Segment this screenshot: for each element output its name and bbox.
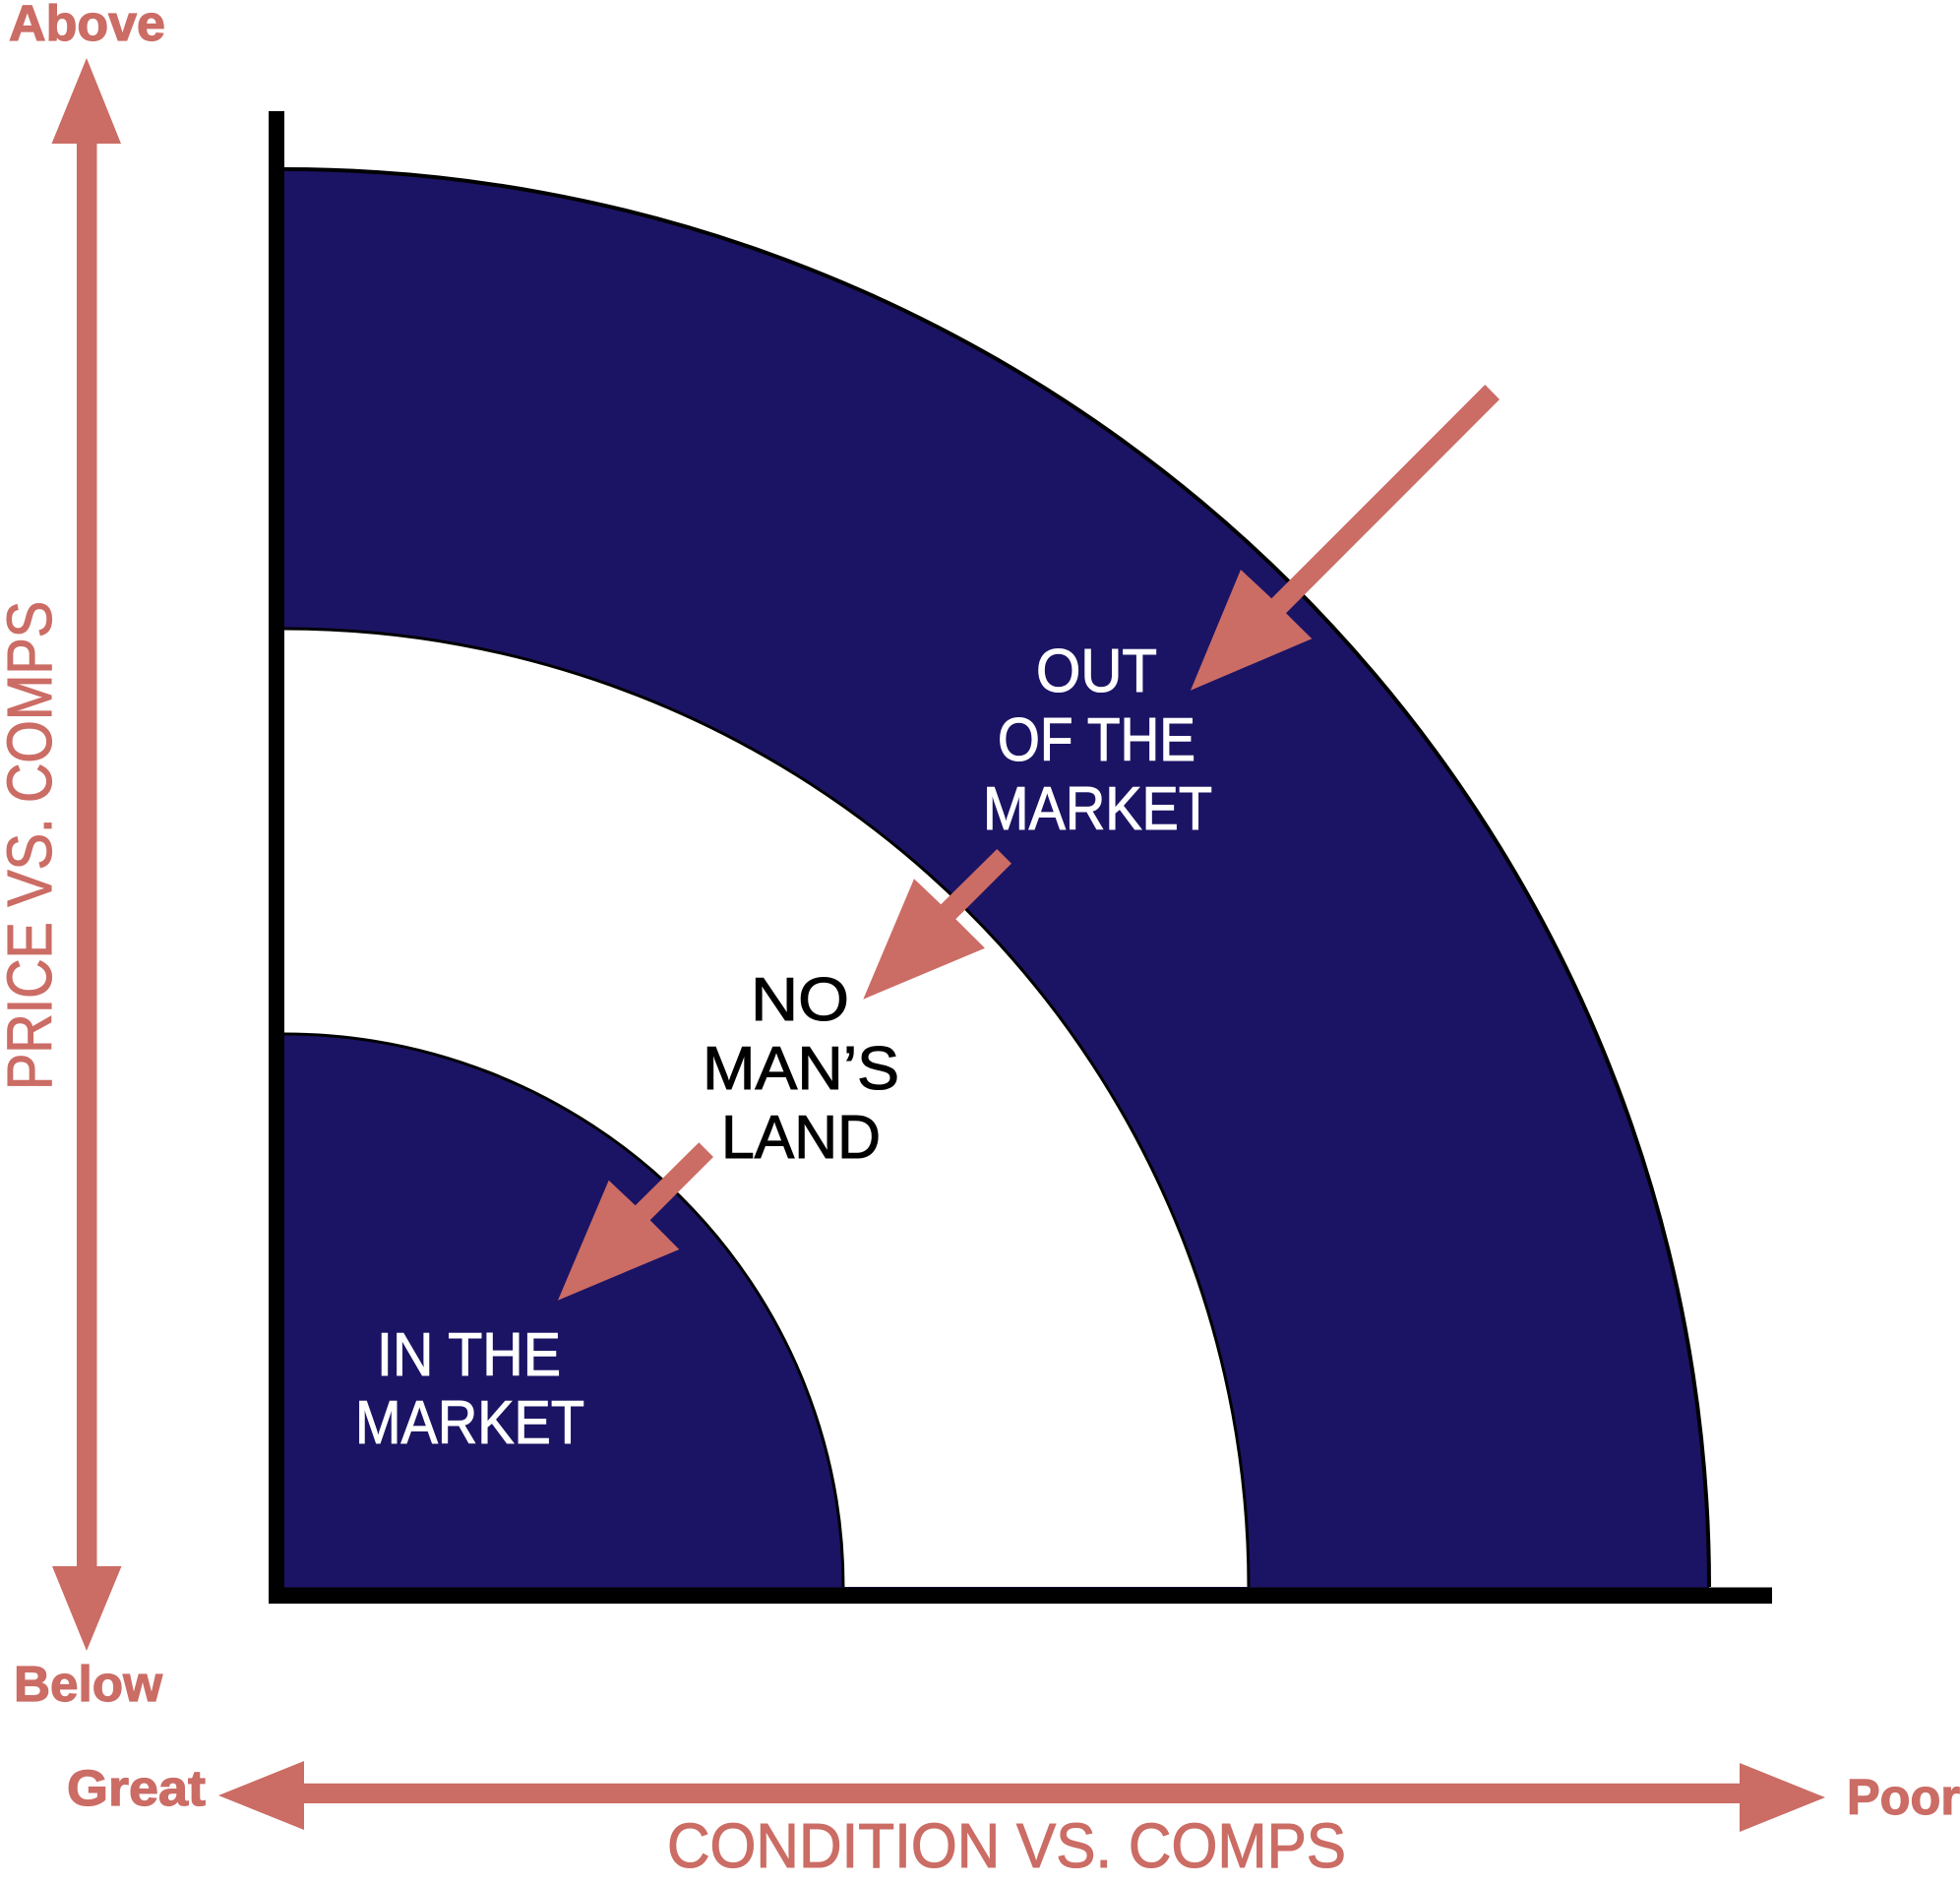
chart: concentric market zones — [284, 169, 1709, 1590]
chart axes — [269, 111, 1772, 1604]
label: out of the market: MARKET — [983, 775, 1212, 843]
label: out of the market — [983, 638, 1212, 843]
zone: in the market outline — [284, 1034, 843, 1587]
arrow: out of the market — [1191, 385, 1500, 691]
zone: out of the market — [284, 169, 1709, 1590]
label: out of the market: OF THE — [998, 706, 1195, 774]
label: condition vs. comps: CONDITION VS. COMPS — [667, 1810, 1346, 1881]
label: in the market: MARKET — [355, 1389, 584, 1457]
zone: in the market — [284, 1034, 843, 1587]
arrow: horizontal condition axis — [218, 1761, 1825, 1832]
zone: no man's land — [284, 629, 1249, 1587]
label: poor: Poor — [1847, 1769, 1960, 1825]
arrow: in the market — [558, 1142, 713, 1301]
label: no man's land: MAN’S — [703, 1035, 899, 1103]
zone: no man's land outline — [284, 629, 1249, 1587]
zone: out of the market outline — [284, 169, 1709, 1587]
arrow: no man's land — [863, 849, 1011, 1000]
label: in the market: IN THE — [377, 1321, 561, 1389]
arrow: vertical price axis — [51, 58, 122, 1651]
label: below: Below — [14, 1656, 162, 1712]
label: out of the market: OUT — [1036, 638, 1157, 705]
label: no man's land: NO — [751, 966, 849, 1034]
label: no man's land — [703, 966, 899, 1172]
label: no man's land: LAND — [721, 1104, 881, 1172]
label: in the market — [355, 1321, 584, 1457]
label: great: Great — [67, 1760, 206, 1816]
